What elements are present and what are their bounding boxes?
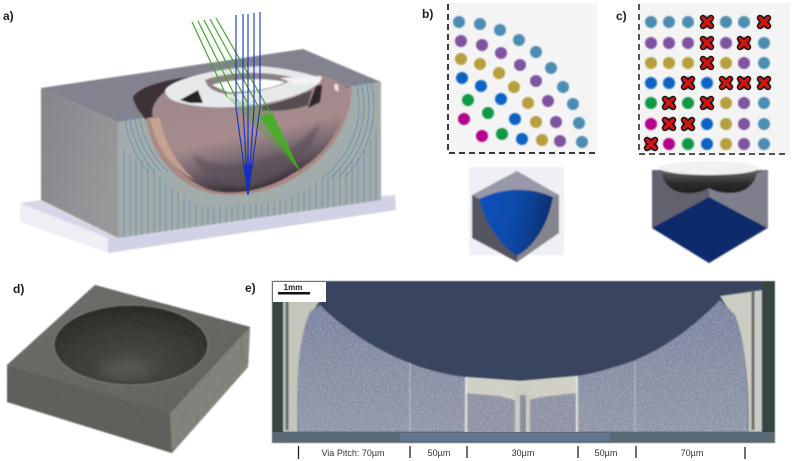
via pitch axis — [298, 446, 745, 459]
label: e): e) — [245, 281, 256, 295]
hemispherical cavity — [146, 87, 352, 195]
scale bar — [273, 282, 326, 302]
panel a: cross-section of the block — [20, 0, 396, 253]
icon: block with dark blue flat base — [652, 161, 768, 263]
panel b: via layout quarter — [448, 3, 597, 153]
scale bar: 1mm — [284, 283, 302, 292]
via channel arcs — [124, 80, 374, 178]
via pitch axis: 50µm — [428, 448, 450, 458]
cavity rim back — [133, 70, 352, 120]
panel c: via layout grid with failed vias — [639, 3, 790, 154]
base plate — [20, 195, 396, 253]
mirror sphere — [152, 68, 348, 192]
reflection on sphere rim — [165, 66, 339, 111]
block faces — [41, 49, 381, 238]
via pitch axis: Via Pitch: 70µm — [321, 448, 385, 458]
label: d): d) — [13, 282, 24, 296]
via channels — [124, 130, 376, 238]
panel e: micrograph cross-section — [272, 281, 775, 443]
via field — [297, 300, 748, 432]
bowl — [54, 305, 208, 385]
bottom strip — [272, 432, 775, 443]
central 30 micron band — [410, 362, 635, 433]
via texture — [298, 300, 748, 433]
via pitch axis: 30µm — [512, 448, 534, 458]
label: b): b) — [422, 7, 433, 21]
label: a): a) — [3, 9, 14, 23]
failed via crosses — [647, 18, 768, 148]
via pitch axis: 50µm — [595, 448, 617, 458]
bright side columns — [283, 290, 762, 432]
blue light rays — [236, 12, 260, 195]
icon: hexagonal block with blue cavity — [469, 167, 564, 262]
green light rays — [192, 18, 301, 173]
sphere dark band — [192, 122, 320, 187]
label: c): c) — [616, 9, 627, 23]
panel d: machined metal block photo — [7, 285, 250, 453]
surface grain — [7, 285, 250, 453]
sphere highlight — [150, 118, 195, 180]
via pitch axis: 70µm — [681, 448, 703, 458]
